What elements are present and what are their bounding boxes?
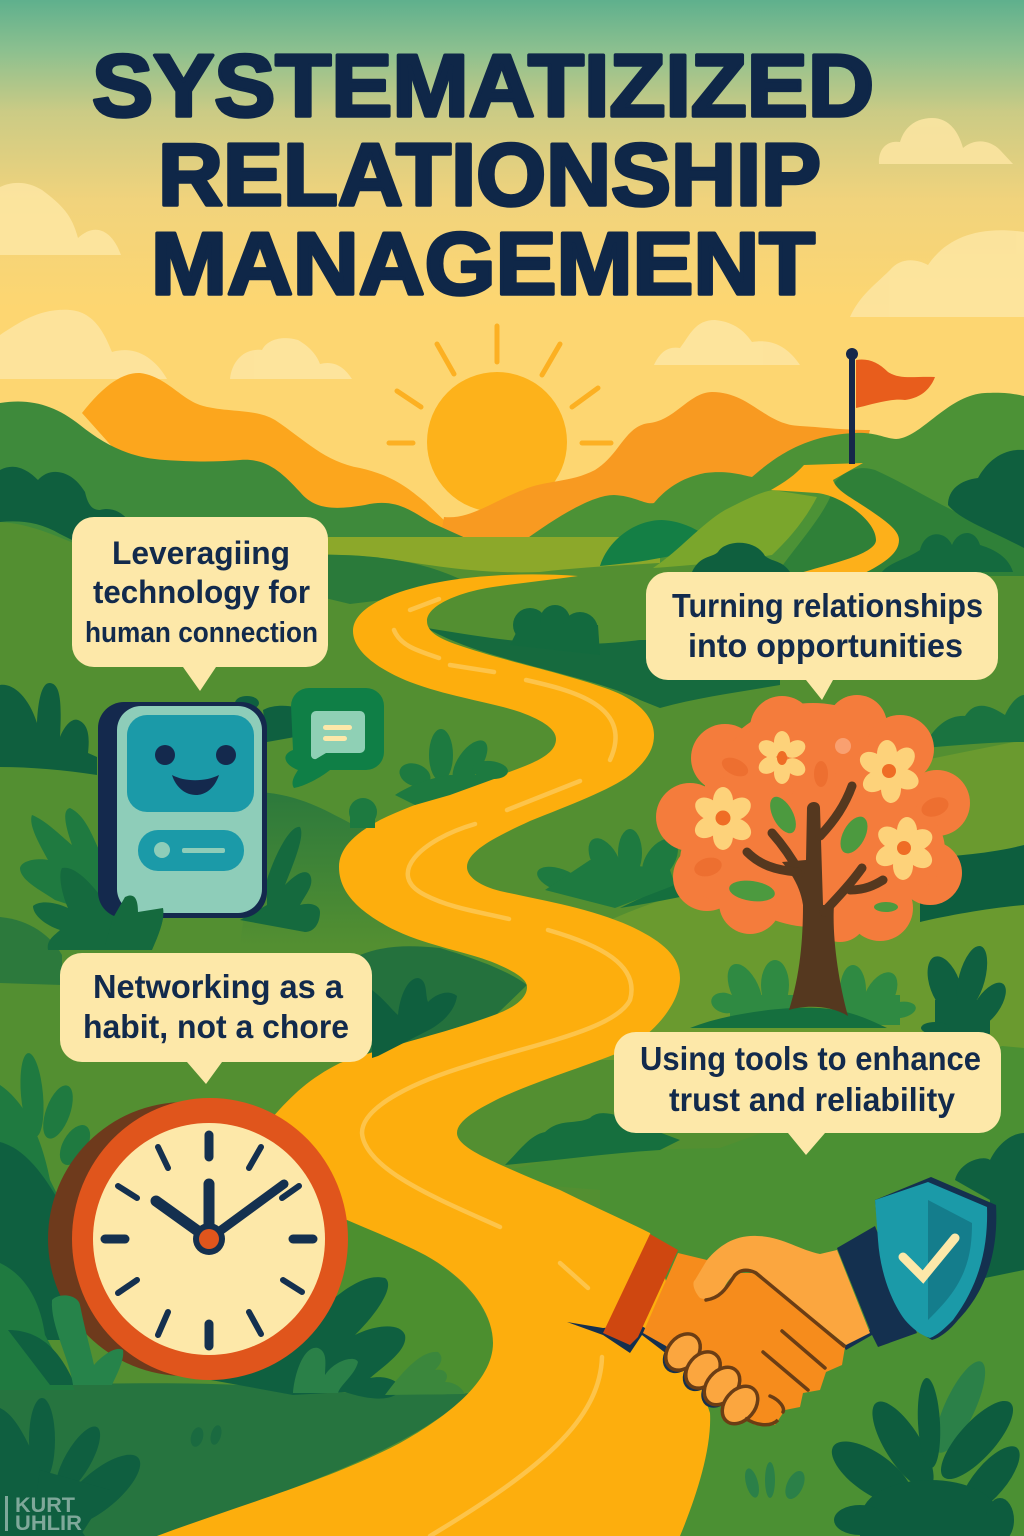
callout: technology: human connection [85,617,318,649]
callout: networking: habit, not a chore [83,1008,349,1045]
dark band right of road [427,628,780,708]
illustration: smiling phone [98,702,267,945]
dark hill behind left bubble [300,555,462,604]
winding hilltop path [771,463,899,574]
right dark clump near tree top [925,695,1024,748]
right lower hill [480,1046,1024,1536]
valley lime band [320,537,660,597]
clock ticks [105,1135,313,1346]
illustration: tree with flowers [656,695,970,1016]
callout: technology: technology for [93,574,310,610]
left orange mountain [82,373,470,545]
callout: networking [60,953,372,1084]
tree trunk and branches [747,786,883,1016]
left green hill [0,401,470,600]
callout: trust [614,1032,1001,1155]
icon: sun with rays [389,326,611,512]
left cuff [603,1234,678,1345]
bushes: left side [0,683,509,1058]
dark clump behind shield [955,1133,1024,1278]
watermark [5,1494,82,1535]
finger shadows [656,1330,744,1415]
bushes: right side [510,605,685,908]
right dark tree clump [948,450,1024,548]
winding golden road [157,574,710,1536]
shaded notch hill left of road [360,946,527,1058]
right hand [693,1236,870,1345]
callout: networking: Networking as a [93,968,344,1005]
sky background [0,0,1024,560]
right sleeve [837,1226,917,1350]
title: RELATIONSHIP [158,125,821,224]
fingers [659,1327,765,1431]
callout: relationships: into opportunities [688,627,963,664]
tree flowers [691,731,936,880]
callout: technology [72,517,328,691]
navy under-sleeve [567,1322,672,1358]
right field olive [600,740,1024,1060]
callout: technology: Leveragiing [112,535,290,571]
lime slope on right hill [653,490,817,568]
hand outlines [706,1270,844,1412]
bottom right plant [742,1355,1024,1536]
callout: trust: trust and reliability [669,1081,956,1118]
callout: relationships: Turning relationships [672,587,983,624]
watermark: KURT [15,1494,75,1517]
right orange mountain [440,392,870,540]
dark tree clump: left horizon [0,467,140,540]
tree foliage details [692,738,951,912]
bush: right horizon [882,533,1013,572]
watermark: UHLIR [15,1512,82,1535]
dark clump under right bubble [505,1113,680,1165]
hill right of phone [240,792,420,945]
clouds [0,118,1024,379]
callout: relationships [646,572,998,700]
bushes: tree base [690,943,1013,1034]
dark ridge behind tree [920,845,1024,922]
small hill left below phone [0,917,62,985]
clock hands [156,1184,284,1255]
bushes: lower left [0,1052,465,1448]
callout: trust: Using tools to enhance [640,1040,981,1077]
dark bush: hill base [692,543,790,572]
right green hill [500,393,1024,600]
icon: chat bubble [285,688,384,788]
left hand [643,1253,845,1425]
title: SYSTEMATIZIZED [92,36,874,135]
shaded hillside right of path [775,468,1024,576]
dark ridge left of tree [620,883,690,908]
bush over clock base [52,1295,123,1385]
field base [0,522,1024,1536]
flag on hilltop [846,348,935,464]
mid green under clock [220,1190,493,1393]
title: MANAGEMENT [151,214,815,313]
dark hill below clock [0,1383,470,1536]
icon: shield with check [875,1177,996,1340]
bushes: bottom left plant [0,1398,151,1536]
illustration: clock [48,1098,348,1385]
road centre markings [362,599,632,1536]
teal mound on right hill [600,520,706,566]
illustration: handshake [567,1226,917,1431]
title [92,36,874,313]
